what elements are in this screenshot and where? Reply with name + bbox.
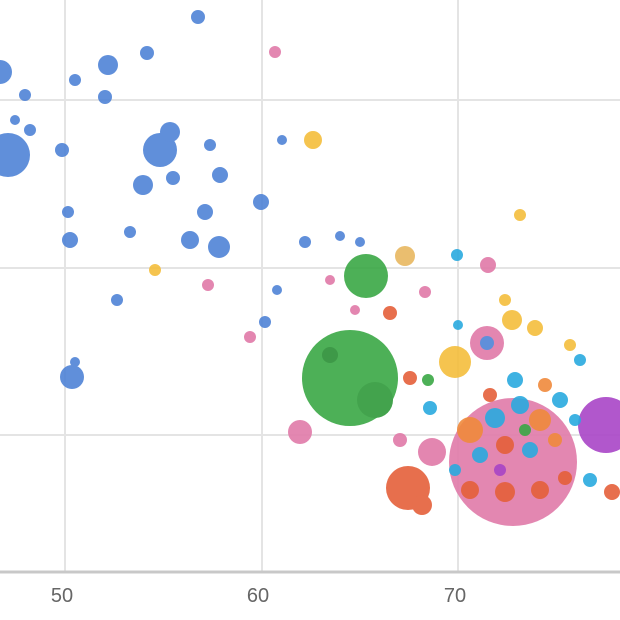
dense cluster — [449, 372, 581, 502]
blue bubbles — [0, 10, 365, 389]
x-axis labels: 70 — [444, 585, 466, 607]
x-axis labels — [51, 585, 466, 607]
green bubbles — [302, 254, 398, 426]
pink big bubble — [449, 398, 577, 526]
purple bubble — [578, 397, 620, 453]
x-axis labels: 50 — [51, 585, 73, 607]
other bubbles — [149, 46, 620, 515]
x-axis labels: 60 — [247, 585, 269, 607]
